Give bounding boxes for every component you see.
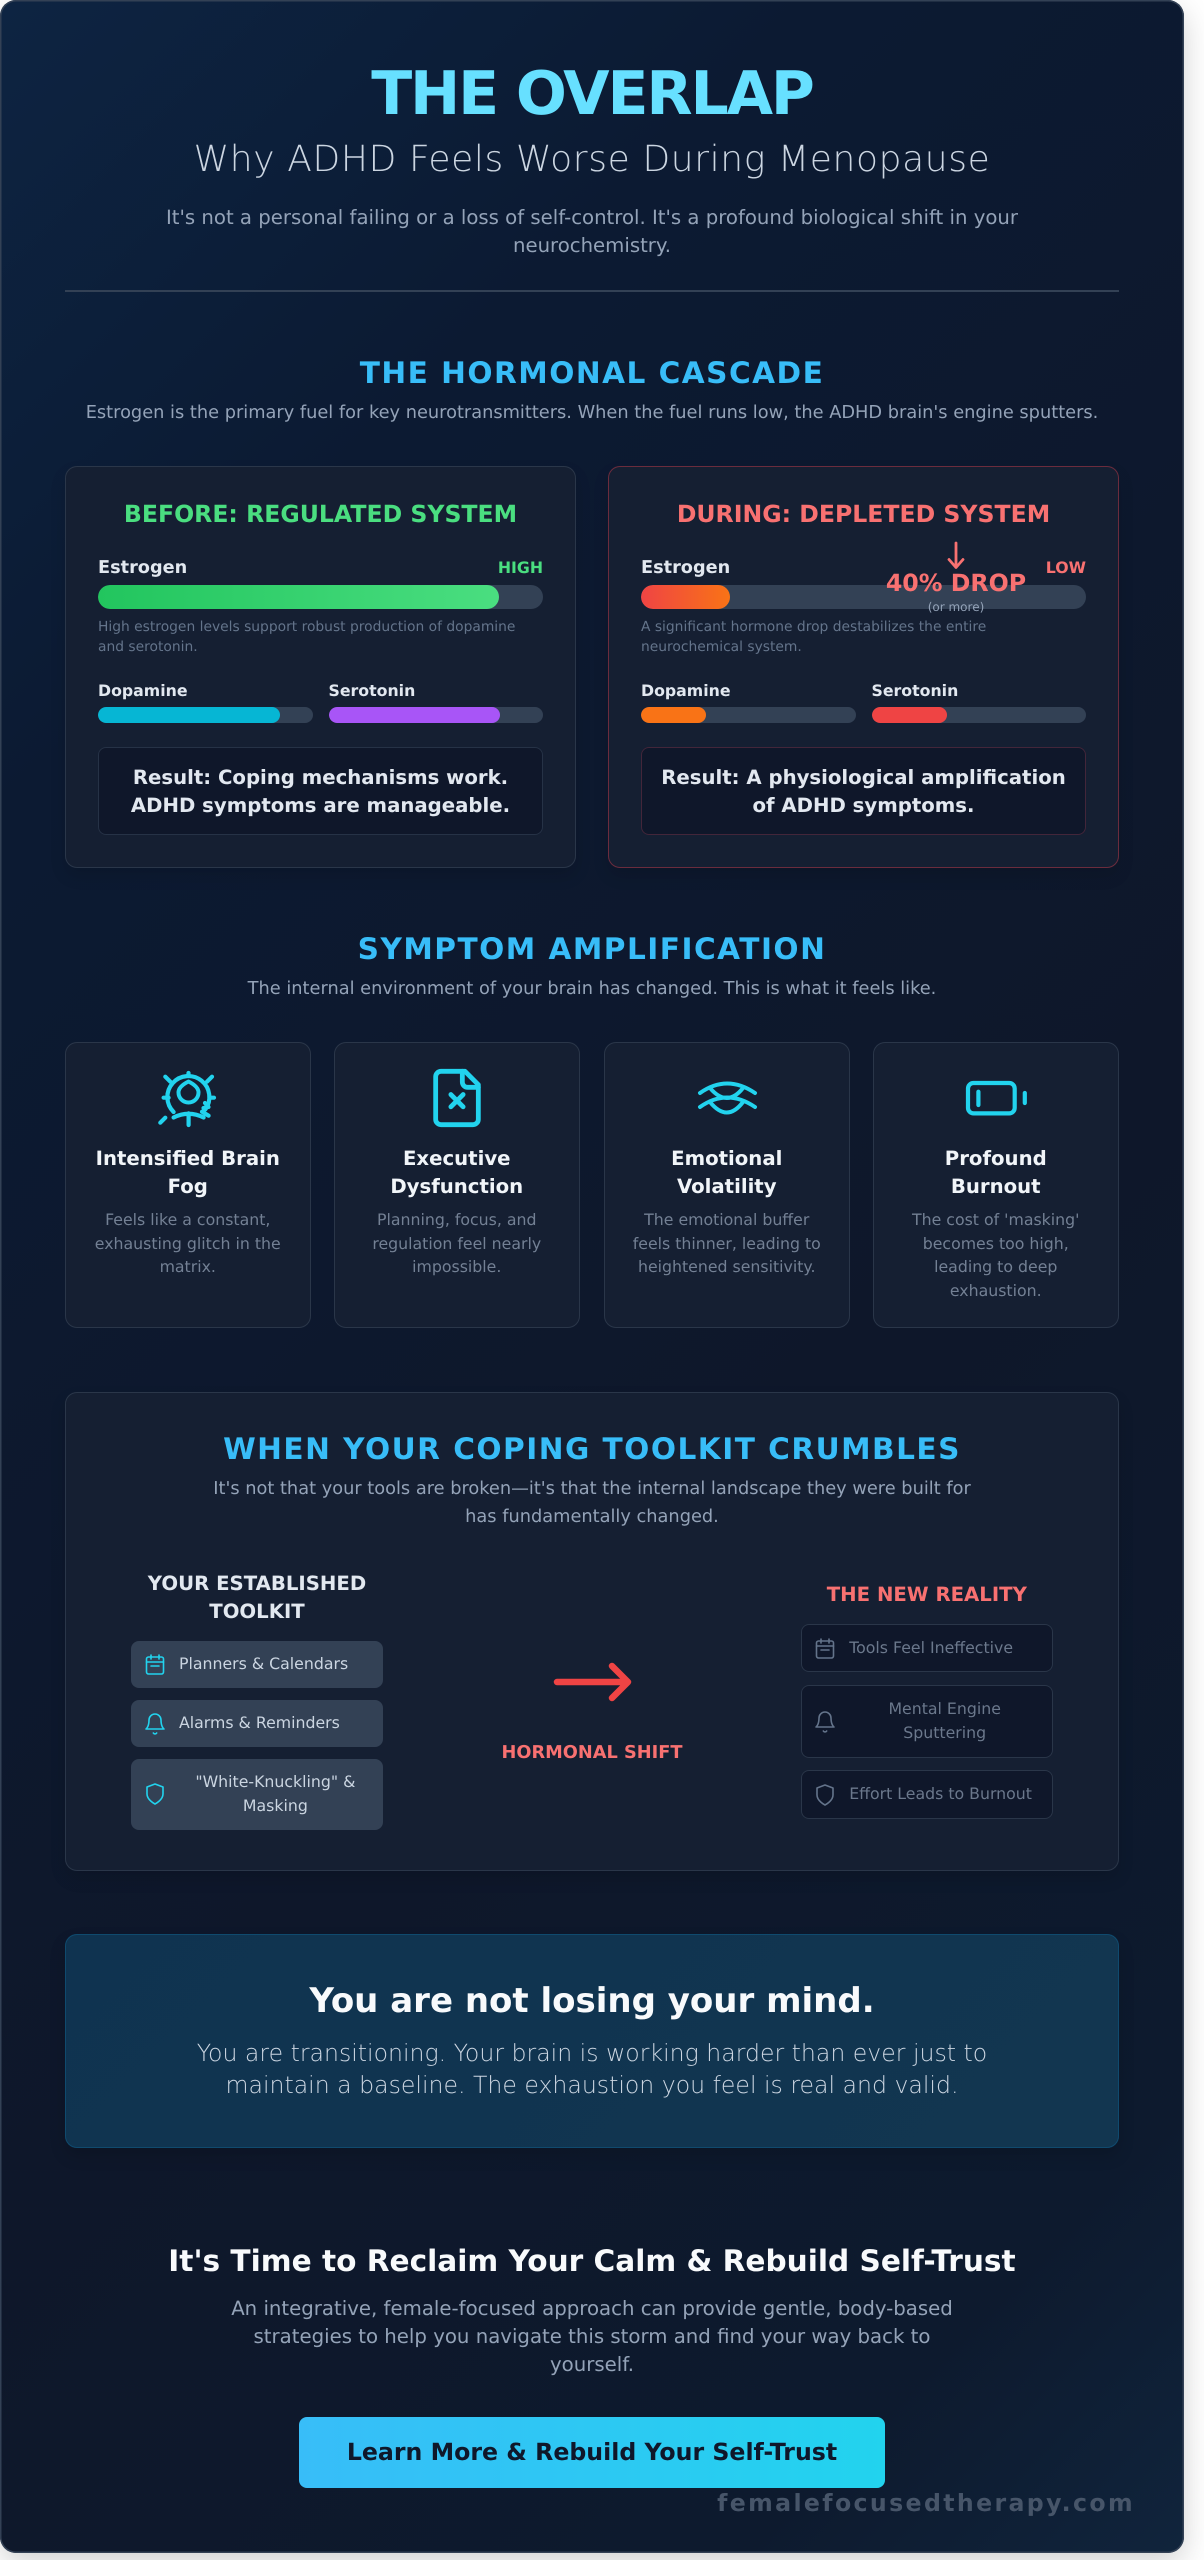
estrogen label: Estrogen: [98, 558, 187, 578]
estrogen note: [641, 619, 986, 655]
card heading: Dysfunction: [390, 1175, 523, 1198]
estrogen note: A significant hormone drop destabilizes the entire: [641, 619, 986, 635]
item: masking: "White-Knuckling" &: [195, 1772, 355, 1791]
established toolkit column: [131, 1572, 383, 1830]
button: [299, 2417, 885, 2488]
result box: Result: A physiological amplification: [661, 766, 1066, 789]
card text: impossible.: [412, 1257, 501, 1276]
estrogen bar: [641, 585, 1086, 609]
panel intro: [213, 1479, 971, 1527]
panel intro: has fundamentally changed.: [465, 1507, 719, 1527]
call to action text: yourself.: [550, 2353, 634, 2376]
card text: matrix.: [160, 1257, 216, 1276]
icon: eyes: [698, 1082, 758, 1114]
item: masking: Masking: [243, 1796, 308, 1815]
callout heading: You are not losing your mind.: [309, 1981, 875, 2021]
result box: [641, 747, 1086, 835]
estrogen note: and serotonin.: [98, 639, 198, 655]
result box: ADHD symptoms are manageable.: [131, 794, 510, 817]
call to action text: [231, 2297, 953, 2376]
card text: [912, 1210, 1080, 1300]
symptom intro: The internal environment of your brain has changed. This is what it feels like.: [248, 978, 936, 998]
result box: of ADHD symptoms.: [752, 794, 974, 817]
item: planners: [131, 1641, 383, 1688]
or more note: (or more): [928, 600, 984, 614]
column heading: YOUR ESTABLISHED: [148, 1572, 366, 1595]
callout text: You are transitioning. Your brain is working harder than ever just to: [197, 2039, 987, 2067]
icon: brain fog: [158, 1070, 216, 1128]
card heading: Profound: [945, 1147, 1047, 1170]
subtitle: Why ADHD Feels Worse During Menopause: [194, 138, 990, 180]
card text: [633, 1210, 821, 1276]
card text: The cost of 'masking': [912, 1210, 1080, 1229]
serotonin bar: [328, 707, 543, 723]
item: sputtering: Mental Engine: [888, 1699, 1001, 1718]
card text: exhausting glitch in the: [95, 1234, 281, 1253]
item: burnout: Effort Leads to Burnout: [849, 1784, 1032, 1803]
new reality column: [801, 1582, 1053, 1819]
heading: call to action: It's Time to Reclaim Your Calm & Rebuild Self-Trust: [168, 2244, 1016, 2278]
card text: The emotional buffer: [644, 1210, 809, 1229]
estrogen note: [98, 619, 515, 655]
card text: becomes too high,: [923, 1234, 1069, 1253]
estrogen label: Estrogen: [641, 558, 730, 578]
dopamine label: Dopamine: [641, 681, 731, 700]
call to action text: An integrative, female-focused approach can provide gentle, body-based: [231, 2297, 953, 2320]
serotonin label: Serotonin: [872, 681, 958, 700]
card: executive dysfunction: [334, 1042, 580, 1328]
button: Learn More & Rebuild Your Self-Trust: [347, 2438, 837, 2466]
panel heading: DURING: DEPLETED SYSTEM: [677, 500, 1050, 528]
card text: leading to deep: [934, 1257, 1057, 1276]
panel: coping toolkit: [65, 1392, 1119, 1871]
intro text: It's not a personal failing or a loss of self-control. It's a profound biological shift in your: [166, 206, 1018, 228]
serotonin label: Serotonin: [328, 681, 415, 700]
high label: HIGH: [498, 558, 543, 576]
title: THE OVERLAP: [371, 59, 813, 129]
card: profound burnout: [873, 1042, 1118, 1328]
callout text: [197, 2039, 987, 2099]
website watermark: femalefocusedtherapy.com: [717, 2489, 1135, 2517]
card text: [95, 1210, 281, 1276]
card heading: Executive: [403, 1147, 511, 1170]
result box: Result: Coping mechanisms work.: [133, 766, 508, 789]
dopamine label: Dopamine: [98, 681, 188, 700]
item: ineffective: [801, 1624, 1053, 1672]
item: masking: [131, 1759, 383, 1830]
column heading: THE NEW REALITY: [827, 1582, 1027, 1606]
card text: feels thinner, leading to: [633, 1234, 821, 1253]
column heading: [148, 1572, 366, 1623]
column heading: TOOLKIT: [209, 1600, 305, 1623]
callout: not losing your mind: [65, 1934, 1119, 2148]
hormonal shift arrow: [554, 1662, 632, 1702]
hormonal shift label: HORMONAL SHIFT: [502, 1743, 682, 1763]
item: planners: Planners & Calendars: [179, 1654, 348, 1673]
card heading: [390, 1147, 523, 1198]
call to action text: strategies to help you navigate this storm and find your way back to: [254, 2325, 930, 2348]
card text: exhaustion.: [950, 1281, 1042, 1300]
item: burnout: [801, 1770, 1053, 1819]
estrogen bar: [98, 585, 543, 609]
item: ineffective: Tools Feel Ineffective: [849, 1638, 1013, 1656]
icon: file x: [433, 1068, 481, 1128]
card text: heightened sensitivity.: [638, 1257, 816, 1276]
panel heading: BEFORE: REGULATED SYSTEM: [124, 500, 517, 528]
result box: [98, 747, 543, 835]
item: sputtering: [801, 1685, 1053, 1758]
panel intro: It's not that your tools are broken—it's that the internal landscape they were built for: [213, 1479, 971, 1499]
drop arrow: [948, 542, 964, 569]
card heading: [945, 1147, 1047, 1198]
panel: during depleted system: [608, 466, 1119, 868]
icon: low battery: [966, 1080, 1027, 1116]
low label: LOW: [1046, 558, 1086, 576]
item: alarms: Alarms & Reminders: [179, 1713, 340, 1732]
card: brain fog: [65, 1042, 310, 1328]
dopamine bar: [98, 707, 312, 723]
cascade intro: Estrogen is the primary fuel for key neurotransmitters. When the fuel runs low, the ADHD brain's engine sputters.: [86, 402, 1098, 422]
estrogen note: neurochemical system.: [641, 639, 802, 655]
card heading: Fog: [168, 1175, 208, 1198]
card text: Feels like a constant,: [105, 1210, 270, 1229]
40% drop callout: 40% DROP: [886, 569, 1026, 597]
item: sputtering: Sputtering: [903, 1723, 986, 1742]
intro text: neurochemistry.: [513, 234, 671, 256]
card heading: Burnout: [951, 1175, 1041, 1198]
card text: Planning, focus, and: [377, 1210, 537, 1229]
card text: regulation feel nearly: [372, 1234, 541, 1253]
panel: before regulated system: [65, 466, 576, 868]
card heading: Intensified Brain: [96, 1147, 280, 1170]
card heading: Emotional: [671, 1147, 782, 1170]
estrogen note: High estrogen levels support robust production of dopamine: [98, 619, 515, 635]
intro text: [166, 206, 1018, 256]
panel heading: WHEN YOUR COPING TOOLKIT CRUMBLES: [223, 1432, 961, 1466]
card text: [372, 1210, 541, 1276]
dopamine bar: [641, 707, 856, 723]
callout text: maintain a baseline. The exhaustion you feel is real and valid.: [226, 2071, 958, 2099]
heading: symptom amplification: SYMPTOM AMPLIFICATION: [358, 932, 826, 966]
card: emotional volatility: [604, 1042, 850, 1328]
heading: the hormonal cascade: THE HORMONAL CASCADE: [360, 356, 824, 390]
card heading: [671, 1147, 782, 1198]
item: alarms: [131, 1700, 383, 1747]
serotonin bar: [872, 707, 1086, 723]
card heading: Volatility: [677, 1175, 777, 1198]
card heading: [96, 1147, 280, 1198]
